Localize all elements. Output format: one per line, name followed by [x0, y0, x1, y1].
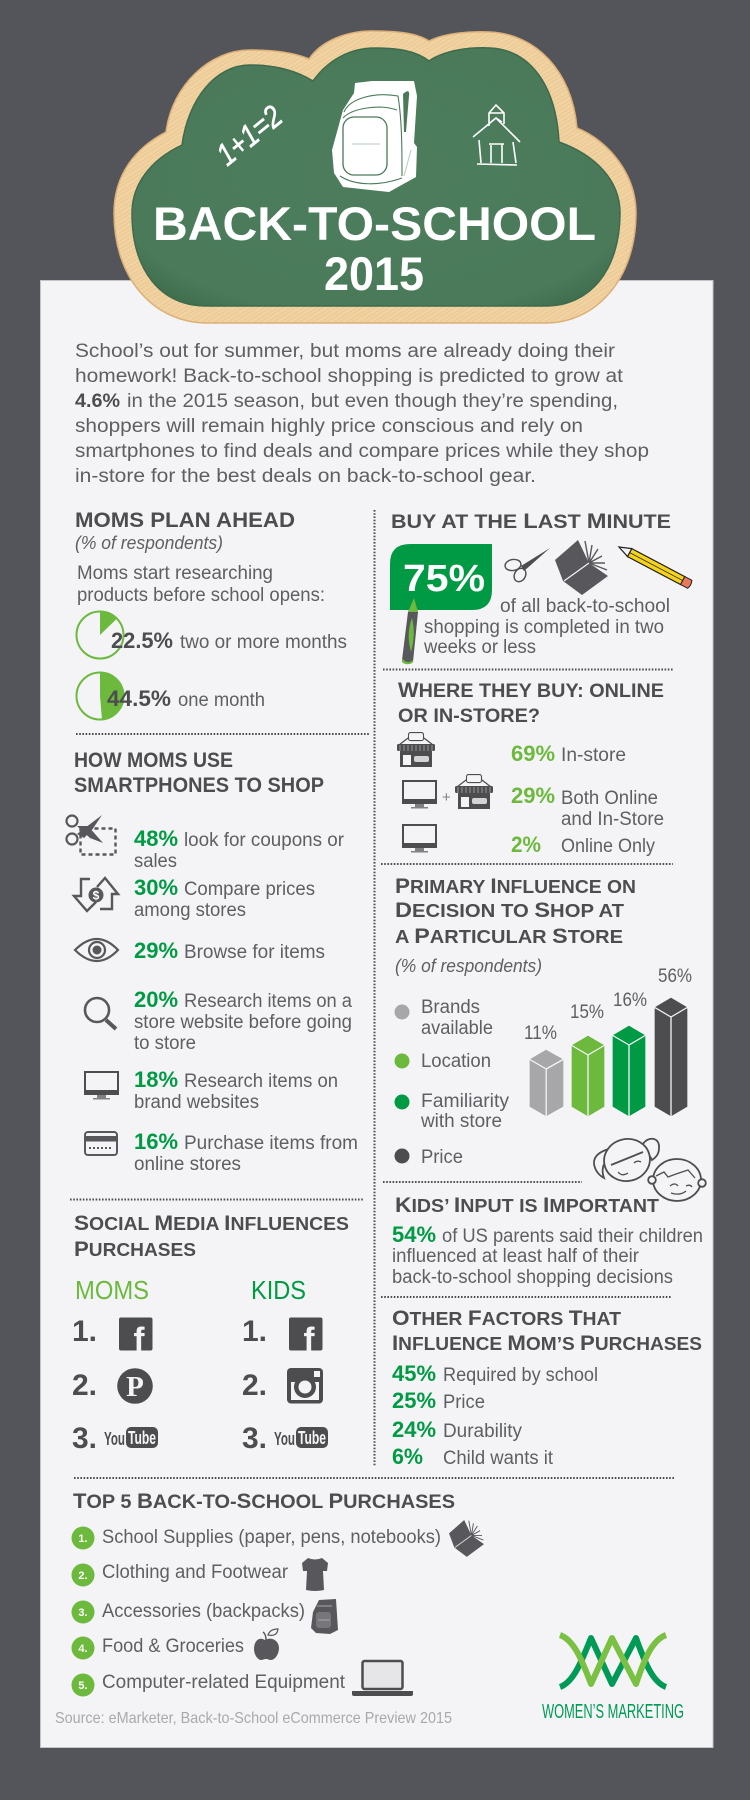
intro paragraph: shoppers will remain highly price conscious and rely on: [75, 416, 583, 437]
stat: both: 29%: [511, 783, 555, 808]
wood frame: [114, 31, 636, 323]
stat text: 54%: [392, 1222, 436, 1247]
callout: 75 percent: [390, 544, 492, 610]
icon: store: [397, 733, 435, 767]
list items: Computer-related Equipment: [102, 1672, 346, 1693]
ranks: kids: [242, 1315, 267, 1455]
stat: two or more months: [111, 628, 347, 653]
stat: brand websites: brand websites: [134, 1092, 259, 1113]
heading: HOW MOMS USE: [74, 749, 233, 772]
icon: book: [555, 540, 608, 595]
stat: store website: Research items on a: [184, 991, 352, 1012]
panel: main content sheet: [40, 280, 713, 1748]
body text: [423, 596, 670, 658]
icon: apple: [254, 1629, 279, 1660]
intro paragraph: School’s out for summer, but moms are already doing their: [75, 341, 616, 362]
icon: kids faces: [594, 1135, 706, 1201]
stat text: [392, 1222, 703, 1288]
stat: online only: Online Only: [561, 836, 655, 857]
stat: coupons: 48%: [134, 826, 178, 851]
icon: youtube kids: [274, 1427, 328, 1449]
stat: in-store: 69%: [511, 741, 555, 766]
stat: both: and In-Store: [561, 809, 664, 830]
stat: browse: [134, 938, 325, 963]
bar chart: [529, 997, 688, 1117]
numbered markers: 1.: [78, 1533, 88, 1545]
source note: Source: eMarketer, Back-to-School eCommerce Preview 2015: [55, 1710, 452, 1727]
stat: price: [392, 1388, 485, 1413]
heading: OTHER FACTORS THAT: [392, 1306, 622, 1330]
stat: child wants it: Child wants it: [443, 1448, 554, 1469]
body text: of all back-to-school: [500, 596, 670, 617]
stat: coupons: sales: [134, 851, 177, 872]
section: other factors: INFLUENCE MOM’S PURCHASES: [392, 1331, 702, 1355]
intro paragraph: homework! Back-to-school shopping is predicted to grow at: [75, 366, 624, 387]
stat text: of US parents said their children: [442, 1226, 703, 1247]
stat: durability: Durability: [443, 1421, 522, 1442]
intro paragraph: smartphones to find deals and compare prices while they shop: [75, 441, 649, 462]
icon: t-shirt: [302, 1558, 328, 1591]
list items: [102, 1527, 441, 1693]
icon: schoolhouse: [473, 105, 520, 165]
section: how moms use smartphones: SMARTPHONES TO SHOP: [74, 774, 324, 797]
pie: 44.5 percent: [76, 672, 125, 720]
stat: browse: Browse for items: [184, 942, 325, 963]
icon: instagram: [287, 1368, 323, 1404]
subheading: (% of respondents): [395, 956, 542, 976]
section: social media: PURCHASES: [74, 1237, 196, 1261]
bar values: 16%: [613, 990, 647, 1011]
icon: laptop: [352, 1661, 413, 1696]
icon: magnifier: [85, 998, 116, 1029]
icon: price arrows: [74, 878, 118, 911]
stat: compare prices: among stores: [134, 900, 246, 921]
stat: brand websites: Research items on: [184, 1071, 338, 1092]
intro paragraph: 4.6%: [75, 391, 120, 412]
stat: price: 25%: [392, 1388, 436, 1413]
heading: A PARTICULAR STORE: [395, 924, 623, 948]
stat text: back-to-school shopping decisions: [392, 1267, 673, 1288]
heading: TOP 5 BACK-TO-SCHOOL PURCHASES: [73, 1489, 455, 1513]
icon: thin scissors: [504, 548, 550, 584]
section: kids input: [392, 1193, 703, 1288]
stat: two or more months: 22.5%: [111, 628, 173, 653]
list items: School Supplies (paper, pens, notebooks): [102, 1527, 441, 1548]
heading: SOCIAL MEDIA INFLUENCES: [74, 1211, 349, 1235]
ranks: moms: 1.: [72, 1315, 97, 1348]
legend: Location: [421, 1051, 491, 1072]
ranks: moms: 3.: [72, 1422, 97, 1455]
bar: location 15 percent: [571, 1035, 605, 1117]
stat: online stores: [134, 1129, 358, 1175]
stat: child wants it: [392, 1444, 554, 1469]
icon: online plus store: +: [442, 789, 451, 806]
title: back-to-school: BACK-TO-SCHOOL: [153, 197, 596, 250]
icon: backpack: [332, 81, 417, 192]
section: buy at the last minute: [390, 509, 693, 664]
stat: two or more months: two or more months: [180, 632, 347, 653]
callout: 75 percent: 75%: [403, 558, 485, 600]
stat: durability: [392, 1417, 522, 1442]
icon: youtube moms: You: [104, 1429, 125, 1449]
heading: KIDS’ INPUT IS IMPORTANT: [395, 1193, 660, 1217]
icon: small backpack: [311, 1599, 338, 1634]
numbered markers: [72, 1526, 94, 1696]
green chalkboard: [132, 48, 620, 306]
icon: online only: [402, 825, 437, 852]
icon: youtube moms: Tube: [128, 1428, 156, 1448]
icon: eye: [75, 939, 118, 961]
icon: pencil: [617, 543, 693, 589]
icon: credit card: [85, 1132, 117, 1155]
section: where they buy: OR IN-STORE?: [398, 705, 540, 727]
icon: crayon: [402, 598, 418, 664]
stat: brand websites: [134, 1067, 338, 1113]
numbered markers: 3.: [78, 1607, 88, 1619]
heading: [395, 874, 636, 948]
ranks: kids: 2.: [242, 1369, 267, 1402]
stat: price: Price: [443, 1392, 485, 1413]
ranks: moms: [72, 1315, 97, 1455]
label: moms: MOMS: [75, 1275, 149, 1305]
legend: with store: [420, 1111, 502, 1132]
stat: online only: 2%: [511, 832, 541, 857]
lead text: Moms start researching: [77, 563, 273, 584]
subheading: (% of respondents): [75, 533, 223, 553]
icon: youtube kids: You: [274, 1429, 295, 1449]
section: other factors: [392, 1306, 702, 1469]
icon: youtube moms: [104, 1427, 158, 1449]
heading: MOMS PLAN AHEAD: [75, 509, 295, 532]
legend: Price: [421, 1147, 463, 1168]
intro paragraph: in the 2015 season, but even though they’re spending,: [127, 391, 618, 412]
stat: browse: 29%: [134, 938, 178, 963]
stat text: influenced at least half of their: [392, 1246, 640, 1267]
section: primary influence: [394, 874, 692, 1168]
lead text: [77, 563, 325, 606]
logo: women's marketing: [542, 1635, 684, 1723]
stat: compare prices: Compare prices: [184, 879, 315, 900]
bar: price 56 percent: [654, 997, 688, 1117]
stat: both: [511, 783, 664, 830]
bar: brands 11 percent: [529, 1049, 564, 1117]
list items: Clothing and Footwear: [102, 1562, 289, 1583]
intro paragraph: [75, 341, 649, 487]
icon: online plus store: [402, 775, 493, 809]
stat: child wants it: 6%: [392, 1444, 423, 1469]
stat: in-store: In-store: [561, 745, 626, 766]
stat: both: Both Online: [561, 788, 658, 809]
ranks: moms: 2.: [72, 1369, 97, 1402]
stat: online stores: 16%: [134, 1129, 178, 1154]
stat: required by school: Required by school: [443, 1365, 598, 1386]
icon: facebook moms: f: [134, 1320, 146, 1358]
numbered markers: 2.: [78, 1570, 88, 1582]
intro paragraph: in-store for the best deals on back-to-school gear.: [75, 466, 536, 487]
stat: store website: store website before going: [134, 1012, 352, 1033]
heading: PRIMARY INFLUENCE ON: [395, 874, 636, 898]
section: moms plan ahead: [75, 509, 347, 720]
lead text: products before school opens:: [77, 585, 325, 606]
icon: facebook moms: [119, 1318, 152, 1358]
stat: in-store: [511, 741, 626, 766]
stat: coupons: [134, 826, 345, 872]
heading: DECISION TO SHOP AT: [395, 898, 625, 922]
icon: pinterest: P: [126, 1371, 144, 1403]
stat: coupons: look for coupons or: [184, 830, 345, 851]
icon: monitor: [84, 1072, 119, 1100]
label: kids: KIDS: [251, 1275, 306, 1305]
stat: store website: to store: [134, 1033, 196, 1054]
stat: one month: one month: [178, 690, 265, 711]
section: social media: [72, 1211, 349, 1455]
numbered markers: 4.: [78, 1643, 88, 1655]
legend: Familiarity: [421, 1091, 510, 1112]
bar values: 15%: [570, 1002, 604, 1023]
stat: required by school: 45%: [392, 1361, 436, 1386]
stat: compare prices: 30%: [134, 875, 178, 900]
heading: BUY AT THE LAST MINUTE: [391, 509, 671, 533]
title: year: 2015: [324, 247, 424, 300]
stat: one month: [107, 686, 265, 711]
list items: Accessories (backpacks): [102, 1601, 305, 1622]
body text: shopping is completed in two: [424, 617, 664, 638]
icon: youtube kids: Tube: [298, 1428, 326, 1448]
ranks: kids: 3.: [242, 1422, 267, 1455]
legend: available: [421, 1018, 493, 1039]
body text: weeks or less: [423, 637, 536, 658]
section: where they buy: [397, 678, 664, 857]
stat: store website: 20%: [134, 987, 178, 1012]
ranks: kids: 1.: [242, 1315, 267, 1348]
section: top 5 purchases: [72, 1489, 484, 1696]
stat: compare prices: [134, 875, 315, 921]
stat: durability: 24%: [392, 1417, 436, 1442]
legend: Brands: [421, 997, 480, 1018]
legend: [394, 997, 510, 1168]
bar values: 56%: [658, 966, 692, 987]
icon: pinterest: [117, 1368, 153, 1404]
stat: online stores: Purchase items from: [184, 1133, 358, 1154]
stat: online only: [511, 832, 655, 857]
bar values: 11%: [524, 1023, 557, 1044]
section: how moms use smartphones: [66, 749, 358, 1175]
icon: price arrows: $: [93, 888, 100, 902]
stat: store website: [134, 987, 352, 1054]
stat: online stores: online stores: [134, 1154, 241, 1175]
header: chalkboard cloud: [114, 31, 636, 323]
icon: small book: [449, 1520, 484, 1557]
logo mark: [560, 1635, 666, 1687]
icon: facebook kids: [289, 1318, 322, 1358]
list items: Food & Groceries: [102, 1636, 244, 1657]
stat: one month: 44.5%: [107, 686, 171, 711]
numbered markers: 5.: [78, 1680, 88, 1692]
bar: familiarity 16 percent: [612, 1025, 646, 1117]
stat: required by school: [392, 1361, 598, 1386]
stat: brand websites: 18%: [134, 1067, 178, 1092]
chalk sum: 1+1=2: [210, 99, 289, 172]
pie: 22.5 percent: [76, 611, 124, 658]
bar values: [524, 966, 692, 1044]
icon: facebook kids: f: [304, 1320, 316, 1358]
heading: WHERE THEY BUY: ONLINE: [398, 678, 664, 702]
icon: scissors and coupon: [66, 815, 116, 854]
